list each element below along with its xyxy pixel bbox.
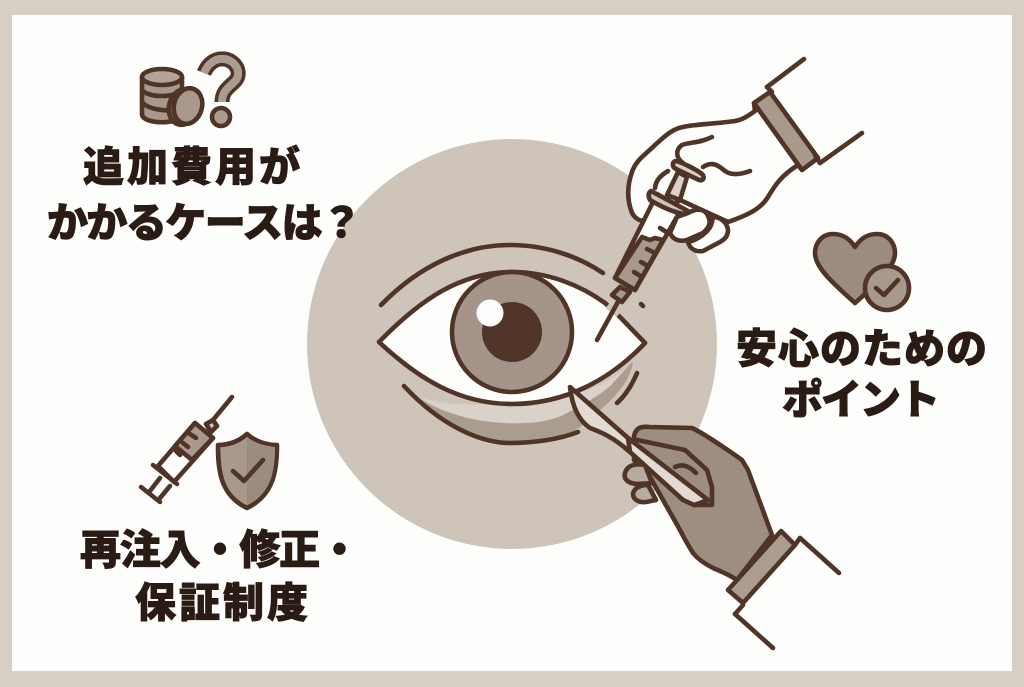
heading: re-injection, correction, warranty: 保証制度 xyxy=(135,580,308,626)
heading: additional costs: かかるケースは？ xyxy=(47,200,362,246)
icon: coins and question mark xyxy=(142,59,238,128)
illustration: eye xyxy=(379,245,645,443)
fingers xyxy=(677,137,712,163)
cuff xyxy=(754,92,818,170)
heading: re-injection, correction, warranty: 再注入・修正・ xyxy=(80,527,360,573)
icon: syringe and shield xyxy=(141,397,277,508)
heading: additional costs: 追加費用が xyxy=(83,144,300,190)
heading: reassurance points: ポイント xyxy=(782,377,940,423)
background circle xyxy=(307,139,717,549)
heading: reassurance points xyxy=(736,326,987,423)
icon: heart with check xyxy=(815,234,909,310)
heading: reassurance points: 安心のための xyxy=(736,326,987,372)
syringe xyxy=(615,194,682,290)
illustration: hand with scalpel xyxy=(570,387,839,648)
heading: additional costs xyxy=(47,144,362,246)
heading: re-injection, correction, warranty xyxy=(80,527,360,626)
illustration: hand with syringe xyxy=(597,59,862,340)
